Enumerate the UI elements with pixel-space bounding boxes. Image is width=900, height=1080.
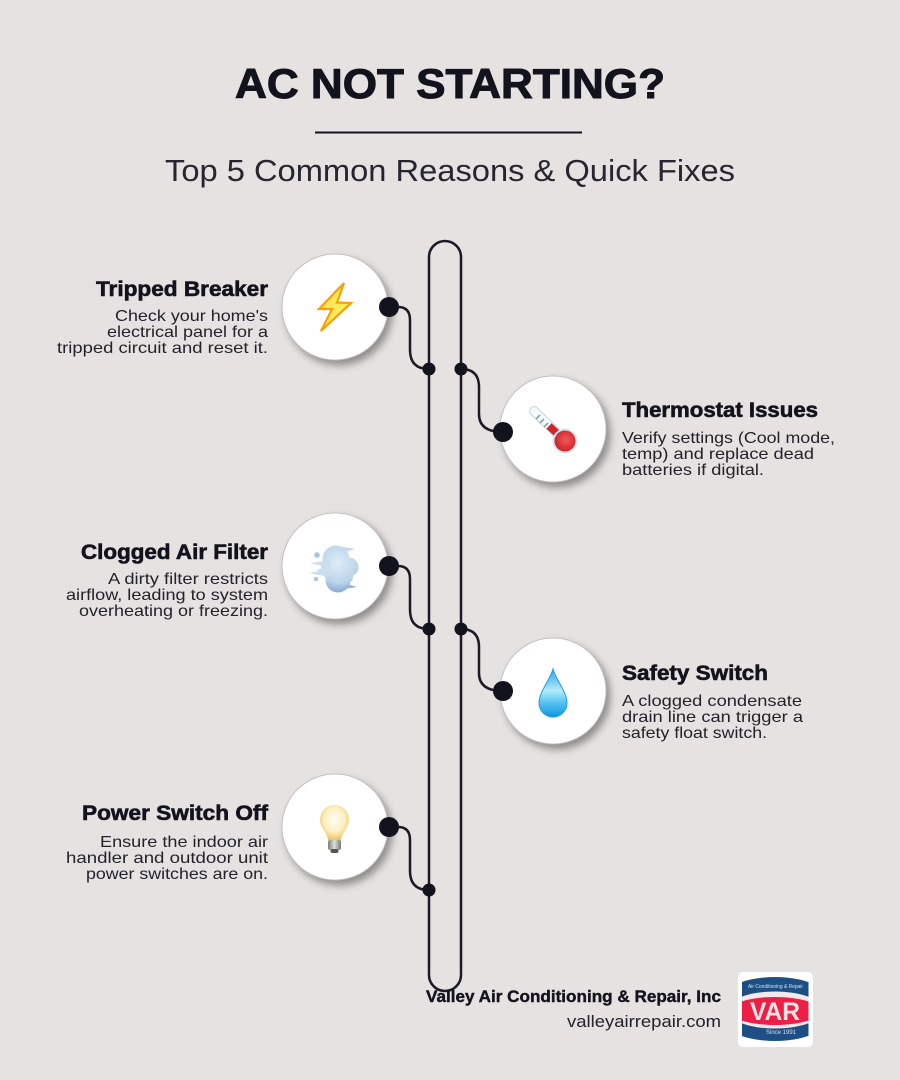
description: safety float switch.	[622, 725, 767, 742]
item: clogged air filter	[66, 513, 399, 620]
junction dots	[422, 362, 468, 896]
description: Check your home's	[115, 308, 268, 325]
item: power switch off	[66, 774, 399, 883]
description: airflow, leading to system	[66, 587, 268, 604]
connector dot	[379, 556, 399, 576]
logo	[738, 972, 813, 1047]
item: tripped breaker	[57, 254, 399, 360]
heading: Power Switch Off	[82, 802, 269, 825]
description: electrical panel for a	[107, 324, 268, 341]
description: temp) and replace dead	[622, 446, 814, 463]
connector dot	[379, 817, 399, 837]
description: handler and outdoor unit	[66, 850, 269, 867]
heading: Thermostat Issues	[622, 399, 818, 422]
description: A clogged condensate	[622, 693, 802, 710]
icon: lightning bolt	[282, 254, 388, 360]
description: A dirty filter restricts	[108, 571, 268, 588]
connector dot	[493, 681, 513, 701]
description: overheating or freezing.	[79, 603, 268, 620]
connector dot	[379, 297, 399, 317]
icon: thermometer	[500, 376, 606, 482]
logo: VAR	[750, 998, 800, 1026]
heading: Safety Switch	[622, 662, 768, 685]
description	[622, 693, 803, 742]
item: thermostat issues	[493, 376, 835, 482]
description	[57, 308, 268, 357]
description: Verify settings (Cool mode,	[622, 430, 835, 447]
footer company name: Valley Air Conditioning & Repair, Inc	[426, 988, 721, 1006]
description: Ensure the indoor air	[100, 834, 269, 851]
logo: Since 1991	[766, 1030, 797, 1036]
icon: light bulb	[282, 774, 388, 880]
description: tripped circuit and reset it.	[57, 340, 268, 357]
description	[66, 571, 268, 620]
description	[66, 834, 269, 883]
heading: Tripped Breaker	[96, 278, 268, 301]
subtitle: Top 5 Common Reasons & Quick Fixes	[165, 153, 735, 188]
description: batteries if digital.	[622, 462, 764, 479]
description: drain line can trigger a	[622, 709, 803, 726]
connector dot	[493, 422, 513, 442]
description	[622, 430, 835, 479]
icon: water drop	[500, 638, 606, 744]
central track with connectors	[389, 241, 503, 991]
logo: Air Conditioning & Repair	[748, 984, 803, 990]
heading: Clogged Air Filter	[81, 541, 268, 564]
icon: air puff	[282, 513, 388, 619]
item: safety switch	[493, 638, 803, 744]
description: power switches are on.	[86, 866, 268, 883]
footer website: valleyairrepair.com	[567, 1013, 721, 1031]
title: AC NOT STARTING?	[235, 60, 665, 107]
